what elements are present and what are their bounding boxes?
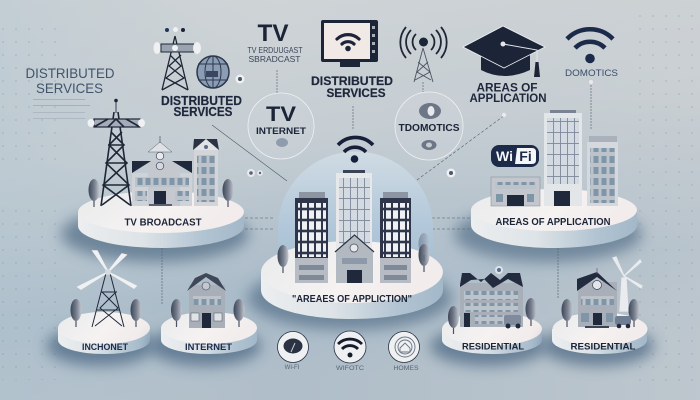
building: small house bbox=[187, 273, 226, 328]
building: centre school bbox=[335, 235, 374, 283]
label: areaes of appliction: "AREAES OF APPLICTION" bbox=[292, 294, 412, 305]
icon: homes circle bbox=[388, 332, 420, 372]
label: distributed services bold: DISTRIBUTED bbox=[161, 93, 242, 108]
icon: wifi circle: WIFOTC bbox=[336, 366, 365, 372]
disc: incohnet bbox=[46, 312, 154, 366]
building: right dark block bbox=[380, 192, 411, 283]
heading: tv broadcast: TV bbox=[258, 20, 288, 47]
icon: small transmission tower bbox=[154, 27, 201, 90]
heading: tv broadcast bbox=[248, 20, 303, 64]
icon: homes circle: HOMES bbox=[394, 366, 418, 372]
building: residential house bbox=[577, 268, 617, 328]
icon: wifi centre bbox=[338, 137, 373, 163]
building: row houses bbox=[460, 266, 523, 327]
icon: trees incohnet bbox=[70, 299, 142, 327]
heading: tv broadcast: TV ERDUUGAST bbox=[248, 46, 303, 55]
icon: trees and car residential two bbox=[562, 299, 640, 328]
icon: wi-fi circle bbox=[278, 332, 308, 371]
building: school with steeple bbox=[132, 136, 192, 206]
label: areas of application top: AREAS OF bbox=[476, 82, 538, 94]
icon: trees bbox=[88, 179, 234, 207]
label: residential two: RESIDENTIAL bbox=[570, 342, 636, 352]
label: areas of application top bbox=[470, 82, 546, 105]
label: domotics top right: DOMOTICS bbox=[565, 68, 618, 79]
icon: broadcast antenna bbox=[400, 27, 447, 82]
label: areas of application: AREAS OF APPLICATION bbox=[496, 217, 610, 228]
icon: large transmission tower bbox=[88, 99, 145, 206]
icon: trees and car residential one bbox=[448, 298, 536, 334]
badge: wifi: Fi bbox=[519, 148, 532, 164]
building: low office bbox=[491, 177, 540, 206]
connector lines bbox=[162, 70, 591, 304]
callout circle: tv internet bbox=[248, 93, 314, 159]
building: tall gabled house bbox=[193, 139, 219, 206]
disc: tv broadcast bbox=[61, 191, 249, 262]
label: internet: INTERNET bbox=[185, 342, 233, 352]
icon: graduation cap bbox=[463, 26, 545, 77]
panel: internet bbox=[149, 273, 261, 366]
label: distributed services centre: DISTRIBUTED bbox=[311, 74, 393, 88]
heading: distributed services: DISTRIBUTED bbox=[26, 65, 114, 81]
disc: internet bbox=[149, 312, 261, 366]
icon: wind turbine bbox=[613, 257, 642, 311]
badge: wifi bbox=[491, 145, 539, 167]
panel: incohnet bbox=[46, 251, 154, 366]
label: tv broadcast: TV BROADCAST bbox=[124, 218, 202, 228]
label: distributed services bold: SERVICES bbox=[174, 104, 233, 119]
icon: globe bbox=[197, 56, 229, 88]
dome bbox=[278, 152, 433, 260]
heading: distributed services bbox=[26, 65, 114, 119]
panel: residential row houses bbox=[430, 266, 546, 366]
disc: residential two bbox=[542, 312, 654, 366]
label: distributed services centre: SERVICES bbox=[326, 86, 386, 100]
building: left dark block bbox=[295, 192, 328, 283]
disc: application centre bbox=[248, 241, 452, 330]
callout circle: domotics: TDOMOTICS bbox=[398, 122, 460, 134]
icon: tv monitor with wifi bbox=[321, 20, 378, 67]
icon: wind tower bbox=[78, 251, 136, 327]
label: distributed services bold bbox=[161, 93, 242, 119]
icon: wifi circle bbox=[334, 331, 366, 372]
callout circle: tv internet: INTERNET bbox=[256, 126, 306, 137]
badge: wifi: Wi bbox=[496, 148, 513, 164]
panel: tv broadcast platform bbox=[61, 99, 249, 262]
icon: wi-fi circle: WI-FI bbox=[285, 365, 300, 371]
callout circle: domotics bbox=[395, 92, 463, 160]
panel: residential house with turbine bbox=[542, 257, 654, 366]
panel: areas of application right bbox=[454, 110, 642, 262]
building: tall tower bbox=[544, 110, 582, 206]
label: areas of application top: APPLICATION bbox=[470, 93, 546, 105]
icon: centre trees bbox=[278, 233, 430, 273]
panel: areas of application centre bbox=[248, 137, 452, 330]
building: centre tower bbox=[336, 170, 372, 278]
heading: distributed services: SERVICES bbox=[36, 80, 103, 96]
icon: wifi top right bbox=[567, 29, 613, 63]
label: incohnet: INCHONET bbox=[82, 342, 128, 352]
label: residential one: RESIDENTIAL bbox=[462, 342, 524, 352]
building: side block bbox=[587, 136, 618, 206]
small node icons bbox=[247, 80, 593, 178]
disc: application right bbox=[454, 189, 642, 262]
disc: residential one bbox=[430, 312, 546, 366]
heading: tv broadcast: SBRADCAST bbox=[248, 55, 301, 64]
icon: trees internet bbox=[171, 299, 244, 327]
icon: small target dot bbox=[236, 74, 244, 84]
label: distributed services centre bbox=[311, 74, 393, 100]
callout circle: tv internet: TV bbox=[266, 103, 296, 126]
